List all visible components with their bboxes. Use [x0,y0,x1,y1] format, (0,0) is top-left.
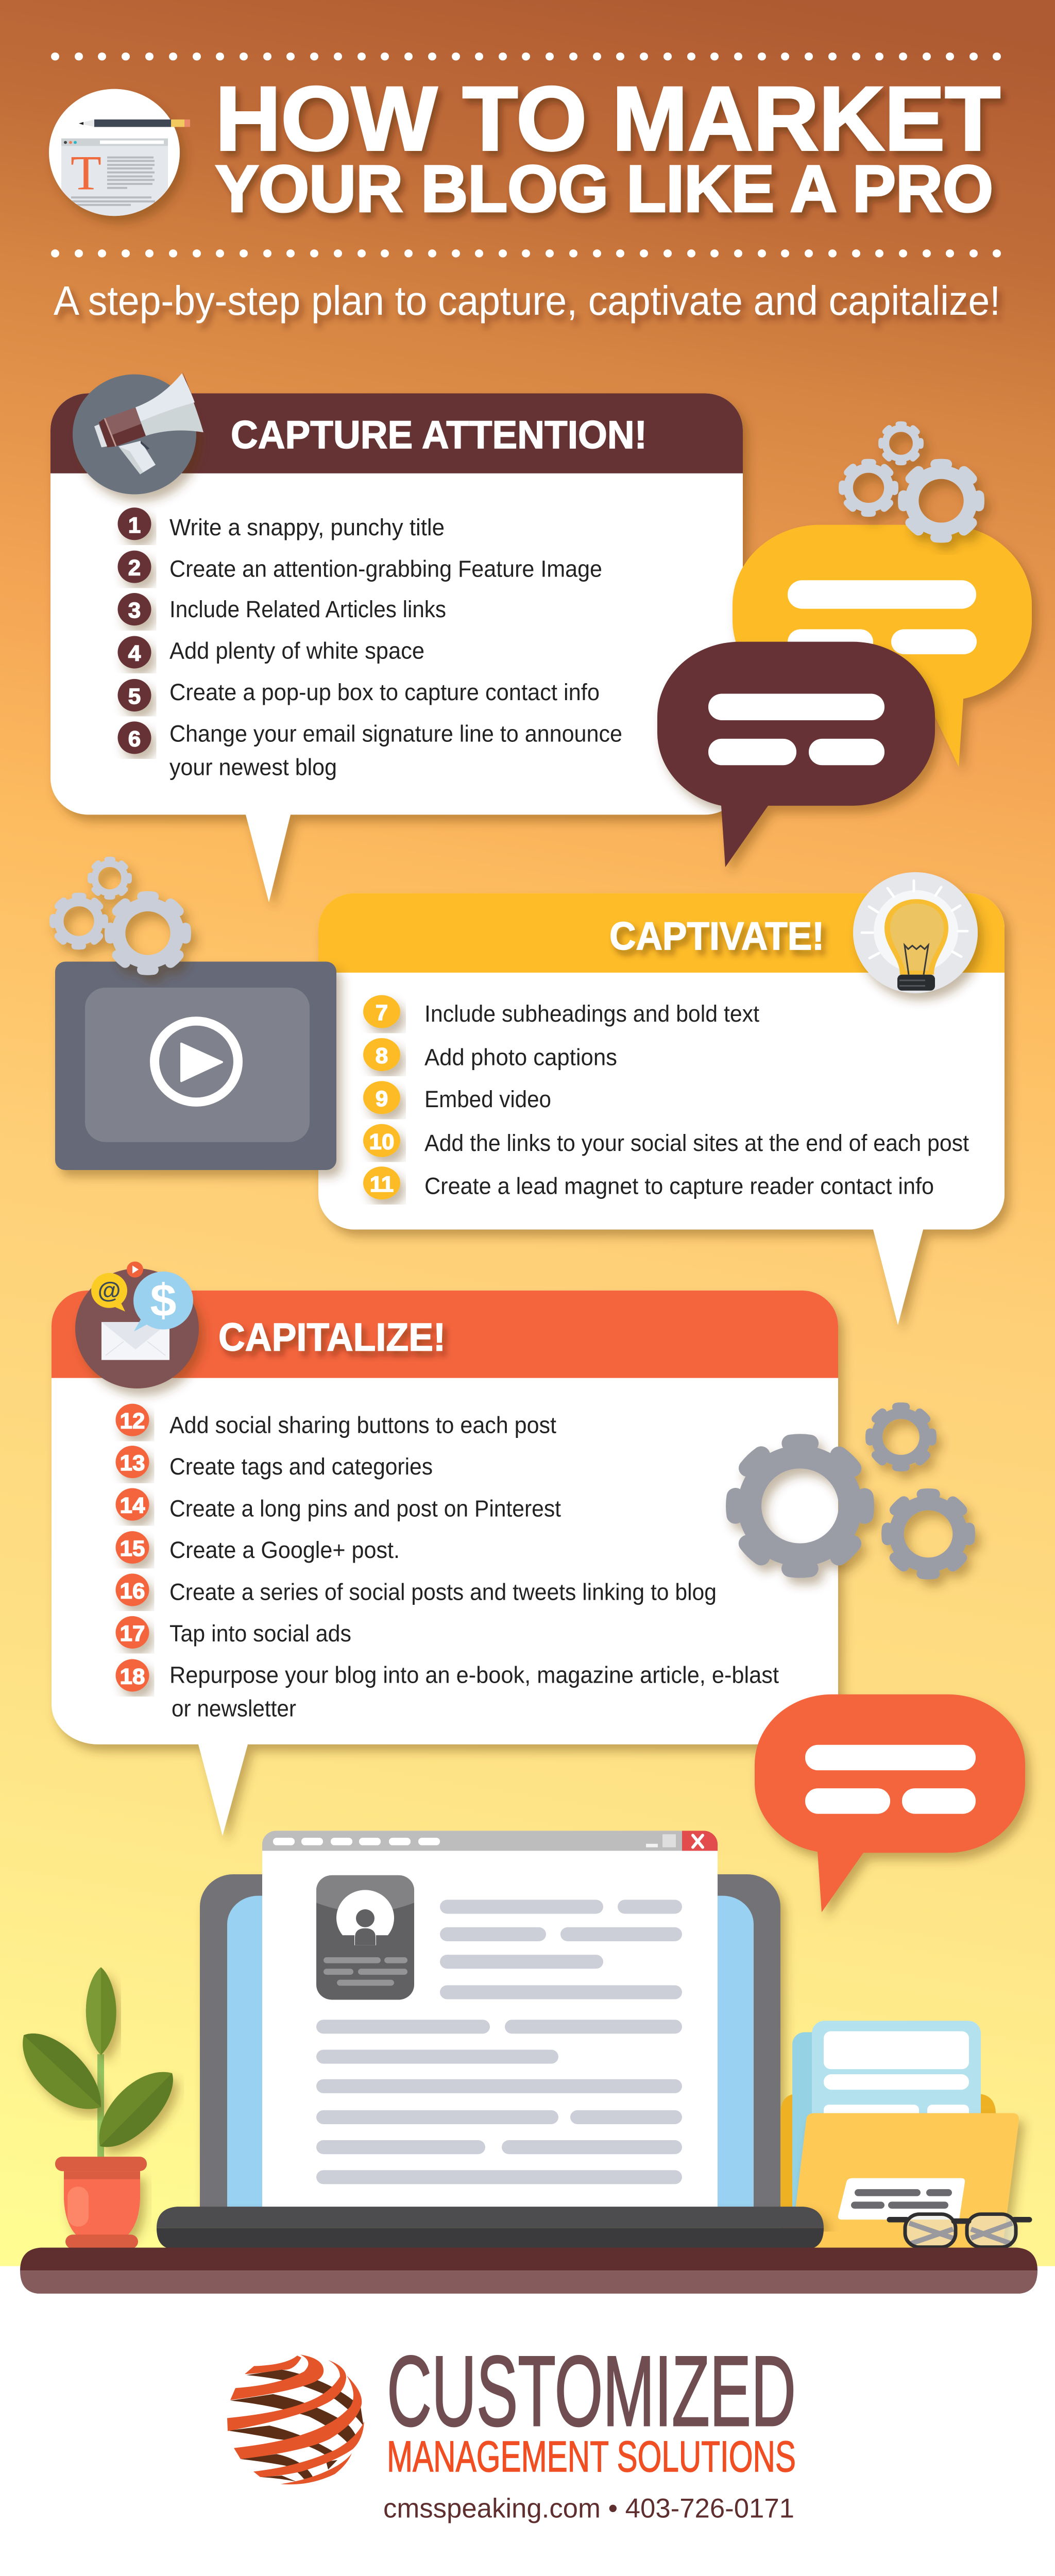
step 10: Add the links to your social sites at the end of each post [424,1130,969,1156]
step 15: Create a Google+ post. [169,1537,400,1563]
panel header band [52,1291,838,1378]
step 5 [117,679,600,711]
step 1: 1 [128,514,141,538]
step 12: Add social sharing buttons to each post [169,1412,556,1438]
step 18: or newsletter [172,1695,296,1721]
step 18 [115,1659,779,1721]
logo wordmark: customized: CUSTOMIZED [387,2335,796,2447]
icon: gears right [735,1406,969,1574]
step 9: 9 [376,1087,388,1111]
title: YOUR BLOG LIKE A PRO [215,151,993,226]
icon: megaphone [73,371,207,494]
step 18: Repurpose your blog into an e-book, magazine article, e-blast [169,1662,779,1688]
step 15 [115,1531,400,1564]
title: HOW TO MARKET [215,68,1000,169]
contact line: cmsspeaking.com • 403-726-0171 [383,2494,794,2523]
title [215,68,1000,226]
step 2: 2 [128,556,141,580]
step 5: 5 [128,685,141,709]
step 14 [115,1488,561,1521]
step 12 [115,1404,556,1438]
step 2 [117,551,602,583]
header icon: blog page with pencil [49,89,190,218]
step 13: Create tags and categories [169,1453,433,1480]
step 6 [117,720,622,781]
icon: gears left [53,859,186,970]
step 3: Include Related Articles links [169,596,446,622]
step 11: 11 [370,1172,394,1197]
step 14: 14 [120,1494,145,1518]
step 9: Embed video [424,1086,551,1112]
heading: CAPTURE ATTENTION! [231,413,647,457]
step 6: 6 [128,727,141,751]
logo: striped globe [227,2354,364,2484]
step 11 [363,1166,934,1199]
chat bubble: brown [657,642,935,867]
panel header band [318,893,1005,973]
step 4: 4 [128,641,141,666]
panel: capture attention [50,371,743,902]
illustration: plant [23,1967,173,2249]
header dots: bottom row [51,249,1001,258]
step 6: Change your email signature line to announce [169,720,622,747]
illustration: folder with papers [780,2021,1019,2248]
step 13: 13 [120,1451,145,1476]
heading: CAPTIVATE! [609,914,824,958]
browser window [262,1831,718,2208]
step 13 [115,1446,433,1480]
step 9 [363,1081,551,1114]
step 11: Create a lead magnet to capture reader contact info [424,1173,934,1199]
step 3: 3 [128,599,141,623]
icon: email and social [75,1262,199,1388]
icon: gears top right [842,424,979,538]
icon: video player [55,962,336,1170]
step 8: 8 [376,1044,388,1068]
step 12: 12 [120,1409,145,1433]
step 4: Add plenty of white space [169,637,424,664]
step 17: 17 [120,1621,145,1646]
step 15: 15 [120,1537,145,1561]
folder label [838,2178,965,2219]
step 8: Add photo captions [424,1044,617,1070]
step 16: 16 [120,1579,145,1603]
heading: CAPITALIZE! [218,1315,446,1359]
step 6: your newest blog [169,754,337,781]
step 17: Tap into social ads [169,1620,351,1647]
header dots: top row [51,53,1001,60]
avatar card [316,1875,414,1999]
step 3 [117,593,446,625]
step 10: 10 [369,1130,394,1154]
chat bubble: orange [755,1694,1025,1912]
header icon: blog page with pencil: T [71,146,101,200]
step 7: Include subheadings and bold text [424,1001,759,1027]
panel: captivate [318,872,1005,1325]
step 2: Create an attention-grabbing Feature Image [169,555,602,582]
chat bubble: yellow [733,525,1032,767]
step 18: 18 [120,1665,145,1689]
icon: light bulb [853,872,978,993]
icon: email and social: @ [98,1277,121,1303]
leaf right [99,2072,173,2147]
panel header band [50,393,743,473]
logo wordmark: management solutions: MANAGEMENT SOLUTIONS [387,2432,796,2481]
step 16 [115,1573,717,1606]
pot [55,2157,147,2249]
shelf [20,2248,1037,2294]
step 1 [117,507,445,540]
illustration: laptop [200,1831,780,2209]
text placeholder lines [316,1900,682,2184]
illustration: glasses [890,2213,1029,2247]
step 1: Write a snappy, punchy title [169,514,445,540]
leaf left [23,2033,101,2109]
step 17 [115,1616,351,1649]
icon: email and social: $ [150,1275,177,1326]
step 16: Create a series of social posts and tweets linking to blog [169,1579,717,1605]
leaf top [86,1967,116,2055]
step 4 [117,636,424,669]
step 14: Create a long pins and post on Pinterest [169,1495,561,1521]
step 8 [363,1038,617,1071]
step 10 [363,1124,969,1157]
laptop base [157,2207,824,2249]
step 7: 7 [376,1001,388,1025]
step 5: Create a pop-up box to capture contact info [169,679,600,705]
panel: capitalize [52,1262,838,1836]
step 7 [363,995,759,1028]
